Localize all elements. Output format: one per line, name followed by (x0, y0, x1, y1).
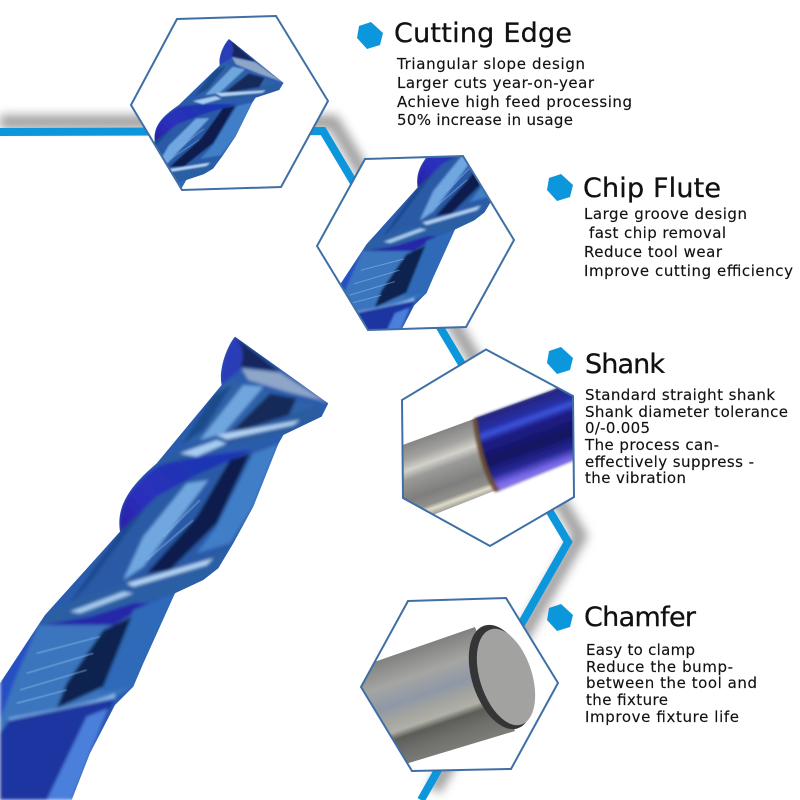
description: shank: Shank diameter tolerance (585, 403, 788, 421)
heading: chamfer: Chamfer (584, 602, 697, 633)
icon: chamfer bullet (547, 604, 573, 631)
panel: chamfer hexagon (355, 598, 558, 771)
description: chip flute: Reduce tool wear (584, 243, 723, 261)
heading: shank: Shank (585, 349, 665, 380)
panel: cutting edge hexagon (130, 15, 330, 191)
chamfer rod photo (362, 624, 536, 763)
panel: shank hexagon (400, 350, 580, 546)
description: cutting edge: 50% increase in usage (397, 111, 573, 129)
description: chip flute: Large groove design (584, 205, 747, 223)
description: shank: 0/-0.005 (585, 419, 650, 437)
icon: shank bullet (547, 347, 573, 374)
description: chamfer (585, 641, 757, 726)
icon: chip flute bullet (547, 174, 573, 201)
description: chamfer: Reduce the bump- (586, 658, 733, 676)
description: chip flute: Improve cutting efficiency (584, 262, 793, 280)
chip flute tool close-up (340, 157, 490, 329)
description: shank: the vibration (585, 469, 686, 487)
panel: chip flute hexagon (316, 155, 516, 331)
description: shank (584, 386, 788, 487)
description: chamfer: Easy to clamp (586, 641, 695, 659)
icon: cutting edge bullet (357, 22, 383, 49)
description: cutting edge (396, 55, 632, 129)
heading: chip flute: Chip Flute (583, 173, 721, 204)
description: chip flute (584, 205, 793, 280)
description: shank: Standard straight shank (585, 386, 775, 404)
description: chamfer: Improve fixture life (585, 708, 739, 726)
connector line (0, 122, 580, 800)
description: cutting edge: Larger cuts year-on-year (397, 74, 595, 92)
description: chip flute: fast chip removal (589, 224, 726, 242)
description: chamfer: the fixture (586, 691, 668, 709)
text block: chip flute (547, 173, 793, 280)
description: cutting edge: Achieve high feed processing (397, 93, 632, 111)
cutting edge tool close-up (154, 39, 284, 188)
description: chamfer: between the tool and (586, 674, 757, 692)
text block: shank (547, 347, 788, 487)
description: shank: effectively suppress - (585, 453, 754, 471)
text block: cutting edge (357, 18, 632, 129)
description: shank: The process can- (584, 436, 719, 454)
main end mill photo (0, 320, 333, 800)
description: cutting edge: Triangular slope design (396, 55, 585, 73)
shank photo (403, 387, 573, 514)
heading: cutting edge: Cutting Edge (394, 18, 572, 49)
text block: chamfer (547, 602, 757, 726)
